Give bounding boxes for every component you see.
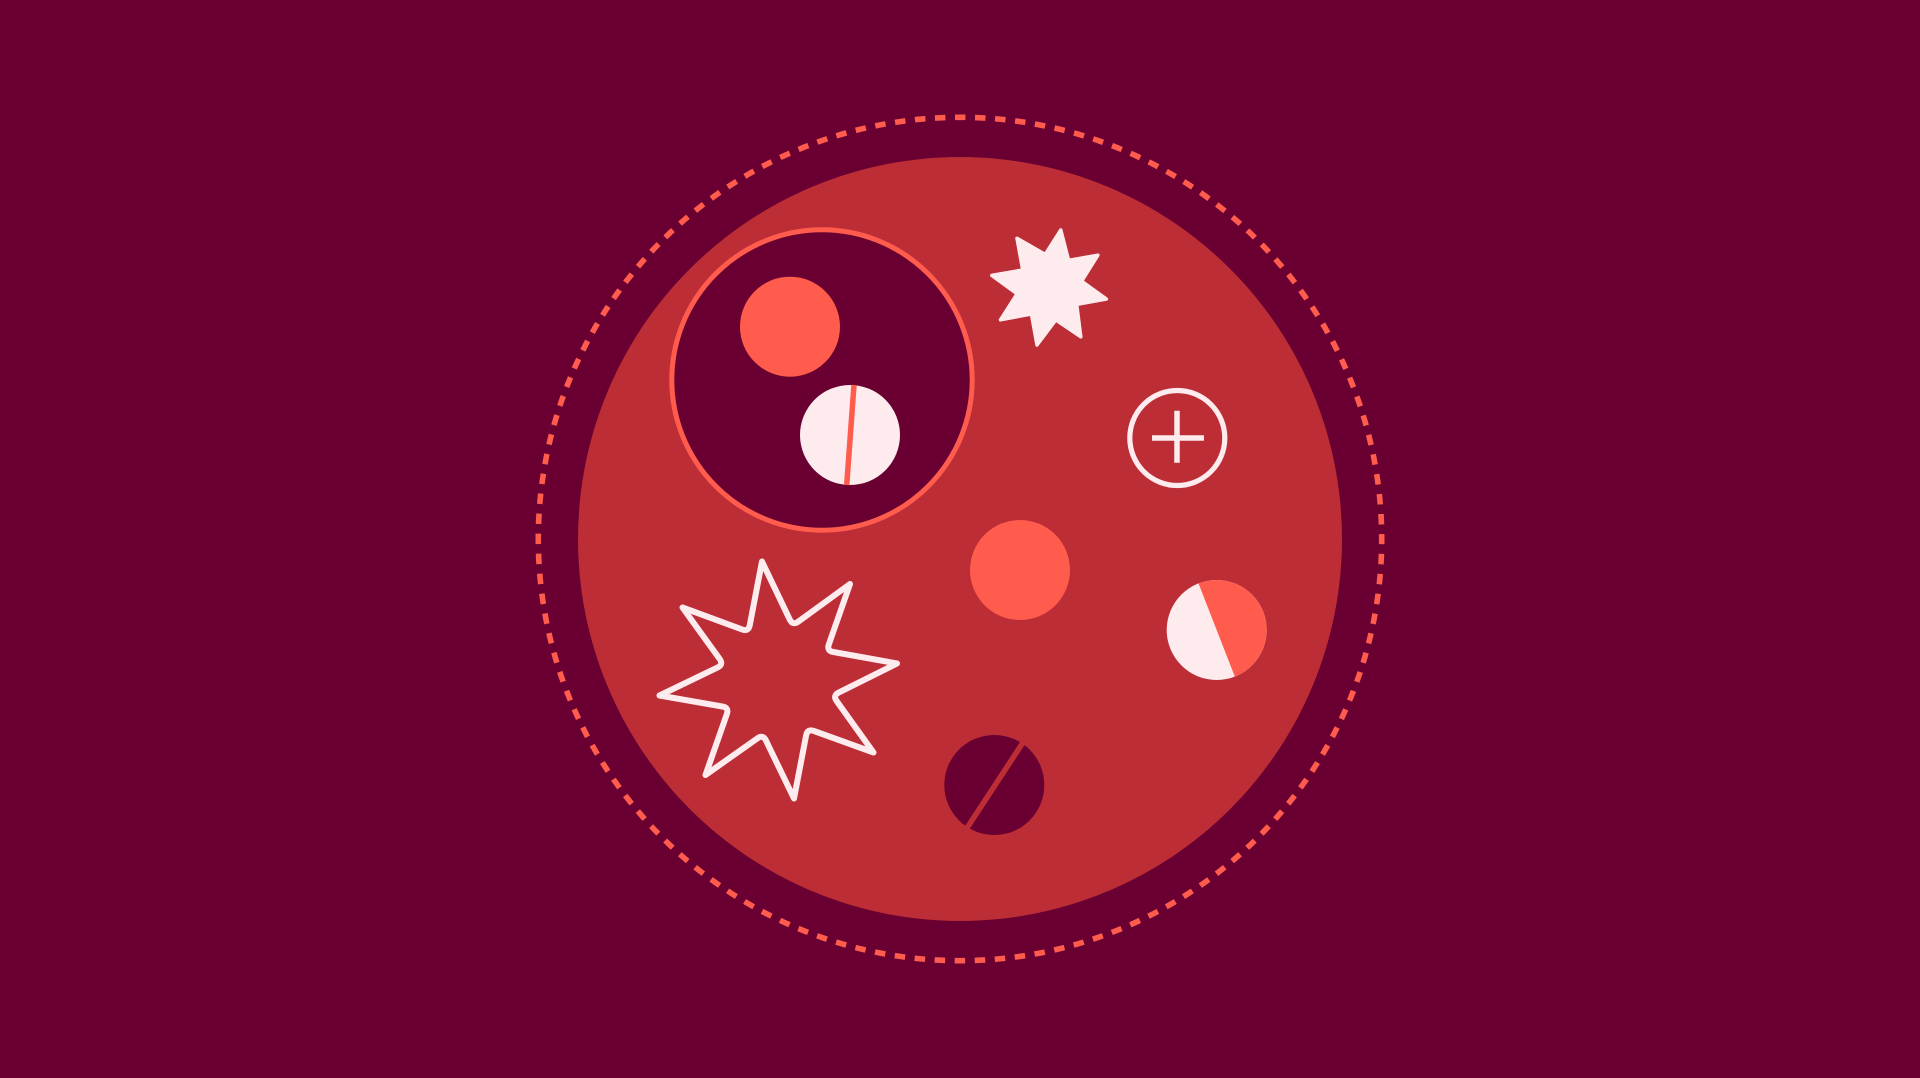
icon: plus in circle: [1130, 390, 1225, 486]
inset dark circle with pills: [672, 230, 972, 530]
dark scored pill: [944, 735, 1044, 835]
white scored pill: [800, 385, 900, 485]
icon: large outlined star: [660, 562, 897, 798]
dashed outer ring: [538, 117, 1382, 961]
two-tone pill: [1166, 580, 1267, 680]
icon: small solid star: [992, 230, 1106, 345]
illustration: pills in a dish: [536, 114, 1384, 964]
large red dish: [578, 157, 1342, 921]
coral pill: [740, 277, 840, 377]
inset circle: [672, 230, 972, 530]
coral pill centre: [970, 520, 1070, 620]
